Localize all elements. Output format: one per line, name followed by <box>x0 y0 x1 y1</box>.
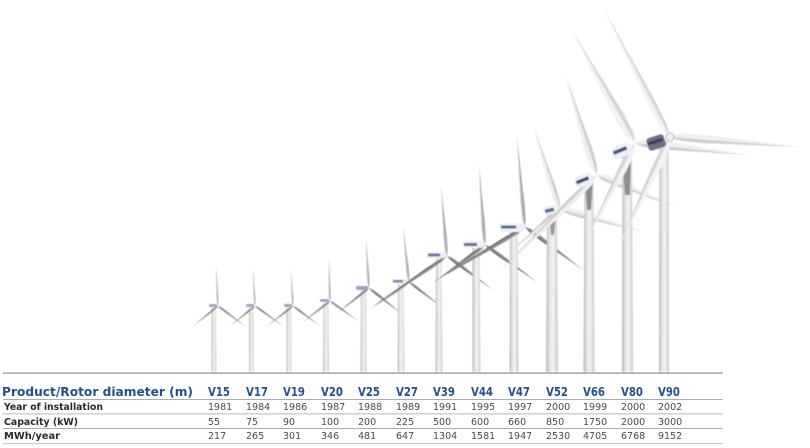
row: capacity: 75 <box>246 417 258 428</box>
row: capacity: 90 <box>283 417 295 428</box>
row: year of installation: 1986 <box>283 402 307 413</box>
turbine V17 <box>230 268 284 372</box>
row: MWh per year: 647 <box>396 431 414 442</box>
table header row: V19 <box>283 384 305 399</box>
row: MWh per year: 301 <box>283 431 301 442</box>
row: year of installation <box>3 402 682 413</box>
table header row: V20 <box>321 384 343 399</box>
turbine V52 <box>506 124 644 372</box>
table header row: V17 <box>246 384 268 399</box>
row: MWh per year: 217 <box>208 431 226 442</box>
row: year of installation: 2000 <box>546 402 570 413</box>
table header row: V27 <box>396 384 418 399</box>
row: MWh per year <box>4 431 682 442</box>
row: MWh per year: 1304 <box>433 431 457 442</box>
turbine V27 <box>371 225 444 372</box>
row: MWh per year: 265 <box>246 431 264 442</box>
turbine V44 <box>432 165 538 372</box>
turbine V66 <box>496 73 680 372</box>
row: MWh per year: 1947 <box>508 431 532 442</box>
turbine V19 <box>267 269 321 372</box>
row: capacity: 850 <box>546 417 564 428</box>
table header row: V90 <box>658 384 680 399</box>
row: year of installation: Year of installation <box>3 402 103 413</box>
row: capacity: 500 <box>433 417 451 428</box>
row: year of installation: 2002 <box>658 402 682 413</box>
turbine V39 <box>369 185 494 372</box>
table header row: Product/Rotor diameter (m) <box>2 384 193 399</box>
row: capacity: 600 <box>471 417 489 428</box>
row: year of installation: 1991 <box>433 402 457 413</box>
row: MWh per year: 481 <box>358 431 376 442</box>
row: capacity: 660 <box>508 417 526 428</box>
table header row: V25 <box>358 384 380 399</box>
turbine V80 <box>567 28 749 372</box>
row: year of installation: 1999 <box>583 402 607 413</box>
table header row: V39 <box>433 384 455 399</box>
row: capacity: 225 <box>396 417 414 428</box>
row: year of installation: 1995 <box>471 402 495 413</box>
row: MWh per year: 4705 <box>583 431 607 442</box>
row: MWh per year: MWh/year <box>4 431 60 442</box>
row: capacity: 2000 <box>621 417 645 428</box>
row: MWh per year: 346 <box>321 431 339 442</box>
turbine V25 <box>336 238 404 372</box>
row: capacity: 3000 <box>658 417 682 428</box>
turbine V15 <box>193 265 247 372</box>
row: capacity: 1750 <box>583 417 607 428</box>
specification table <box>2 384 723 444</box>
row: year of installation: 1984 <box>246 402 270 413</box>
row: MWh per year: 9152 <box>658 431 682 442</box>
row: MWh per year: 6768 <box>621 431 645 442</box>
turbine V90 <box>599 5 800 372</box>
table header row: V80 <box>621 384 643 399</box>
row: year of installation: 1981 <box>208 402 232 413</box>
row: year of installation: 1987 <box>321 402 345 413</box>
row: capacity: Capacity (kW) <box>4 417 78 428</box>
row: year of installation: 1997 <box>508 402 532 413</box>
table header row <box>2 384 680 399</box>
wind turbine lineup <box>193 5 800 372</box>
row: capacity: 55 <box>208 417 220 428</box>
table header row: V15 <box>208 384 230 399</box>
row: capacity <box>4 417 682 428</box>
ground line <box>3 373 723 374</box>
turbine V20 <box>302 258 359 372</box>
row: year of installation: 1988 <box>358 402 382 413</box>
table header row: V52 <box>546 384 568 399</box>
row: capacity: 200 <box>358 417 376 428</box>
table header row: V47 <box>508 384 530 399</box>
turbine V47 <box>432 137 584 372</box>
row: MWh per year: 1581 <box>471 431 495 442</box>
row: year of installation: 1989 <box>396 402 420 413</box>
row: capacity: 100 <box>321 417 339 428</box>
table header row: V44 <box>471 384 493 399</box>
row: MWh per year: 2530 <box>546 431 570 442</box>
table header row: V66 <box>583 384 605 399</box>
row: year of installation: 2000 <box>621 402 645 413</box>
